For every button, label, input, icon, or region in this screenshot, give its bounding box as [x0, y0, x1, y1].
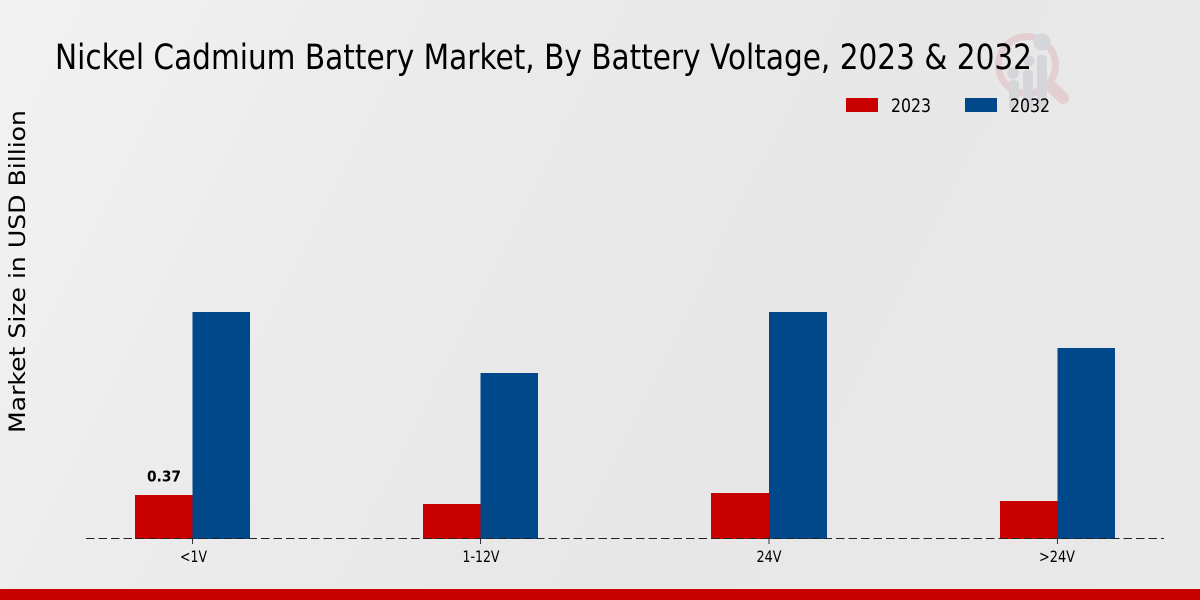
legend item: 2023: [846, 95, 931, 117]
x axis baseline: [86, 538, 1164, 540]
legend item: 2032: 2032: [1010, 95, 1050, 117]
bar group: 1-12V: [423, 373, 538, 539]
legend item: 2032: [965, 95, 1050, 117]
title: Nickel Cadmium Battery Market, By Battery Voltage, 2023 & 2032: [55, 38, 1032, 78]
legend item: 2023: 2023: [891, 95, 931, 117]
bar group: <1V: [135, 312, 250, 539]
data label: 0.37: 0.37: [147, 468, 181, 486]
bar group: >24V: [1000, 348, 1115, 539]
x label: 1-12V: 1-12V: [462, 547, 500, 566]
legend: [846, 95, 1050, 117]
x label: <1V: <1V: [180, 547, 207, 566]
icon: watermark logo magnifier with bars: [998, 34, 1063, 110]
x axis ticks: [192, 539, 1058, 544]
bar group: 24V: [711, 312, 827, 539]
y-axis title: Market Size in USD Billion: [5, 110, 31, 433]
x label: >24V: >24V: [1039, 547, 1075, 566]
x label: 24V: 24V: [756, 547, 782, 566]
bar chart: [86, 312, 1164, 566]
footer bar: [0, 589, 1200, 600]
